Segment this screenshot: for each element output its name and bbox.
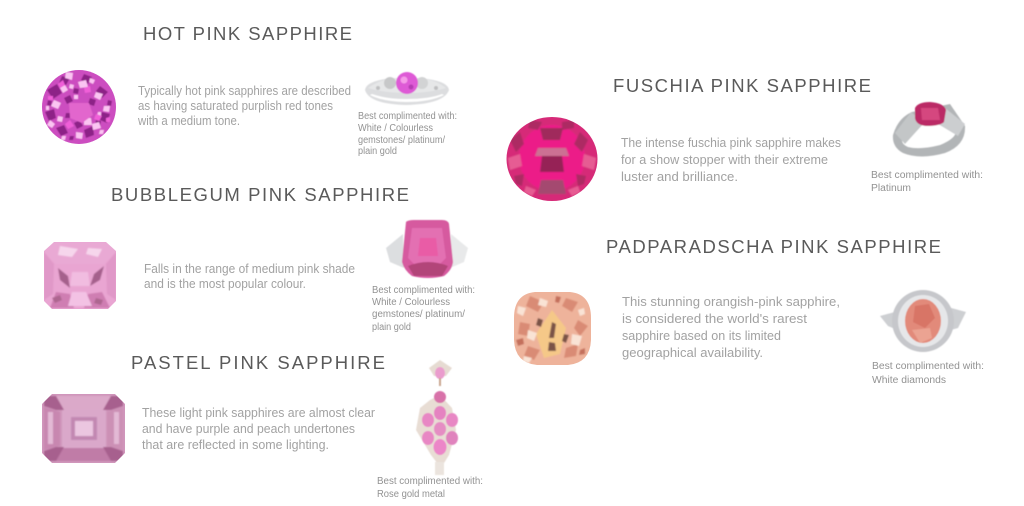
body text: padparadscha: This stunning orangish-pink sapphire, bbox=[622, 295, 840, 309]
note: padparadscha pairing: White diamonds bbox=[872, 375, 946, 386]
note: fuschia pairing: Platinum bbox=[871, 183, 911, 194]
heading: pastel: PASTEL PINK SAPPHIRE bbox=[131, 352, 385, 373]
note: padparadscha pairing: Best complimented with: bbox=[872, 361, 984, 372]
body text: padparadscha: geographical availability. bbox=[622, 346, 763, 360]
gem: bubblegum radiant cut bbox=[44, 242, 116, 309]
body text: pastel bbox=[142, 406, 375, 452]
gem: fuschia oval bbox=[505, 115, 599, 203]
gem: hot pink round bbox=[40, 68, 118, 146]
body text: hot pink: as having saturated purplish red tones bbox=[138, 99, 333, 113]
body text: bubblegum: and is the most popular colour. bbox=[144, 277, 306, 291]
note: pastel pairing bbox=[377, 476, 483, 500]
body text: fuschia: The intense fuschia pink sapphire makes bbox=[621, 136, 841, 150]
body text: hot pink: with a medium tone. bbox=[137, 114, 240, 128]
body text: fuschia: for a show stopper with their extreme bbox=[621, 153, 828, 167]
body text: bubblegum bbox=[144, 262, 355, 291]
panel: padparadscha pink sapphire bbox=[512, 236, 984, 386]
body text: pastel: and have purple and peach undertones bbox=[142, 422, 355, 436]
body text: fuschia: luster and brilliance. bbox=[621, 170, 738, 184]
note: hot pink pairing: gemstones/ platinum/ bbox=[358, 135, 445, 146]
body text: pastel: These light pink sapphires are almost clear bbox=[142, 406, 375, 420]
note: hot pink pairing: White / Colourless bbox=[358, 123, 433, 134]
body text: hot pink: Typically hot pink sapphires are described bbox=[138, 84, 351, 98]
body text: bubblegum: Falls in the range of medium pink shade bbox=[144, 262, 355, 276]
body text: hot pink bbox=[137, 84, 351, 128]
note: fuschia pairing bbox=[871, 170, 983, 194]
note: hot pink pairing: Best complimented with: bbox=[358, 111, 457, 122]
panel: bubblegum pink sapphire bbox=[42, 184, 475, 333]
note: bubblegum pairing: gemstones/ platinum/ bbox=[372, 309, 465, 320]
icon: fuschia ring bbox=[893, 102, 965, 156]
icon: padparadscha ring bbox=[880, 290, 966, 352]
body text: padparadscha: is considered the world's rarest bbox=[622, 312, 808, 326]
note: bubblegum pairing: White / Colourless bbox=[372, 297, 450, 308]
note: hot pink pairing bbox=[358, 111, 457, 157]
icon: bubblegum ring bbox=[386, 220, 468, 278]
gem: pastel emerald cut bbox=[40, 392, 127, 465]
heading: padparadscha: PADPARADSCHA PINK SAPPHIRE bbox=[606, 236, 941, 257]
note: pastel pairing: Rose gold metal bbox=[377, 489, 445, 500]
panel: hot pink sapphire bbox=[40, 23, 457, 157]
body text: pastel: that are reflected in some lighting. bbox=[142, 438, 329, 452]
note: bubblegum pairing bbox=[372, 285, 475, 333]
heading: hot pink: HOT PINK SAPPHIRE bbox=[143, 23, 352, 44]
body text: padparadscha: sapphire based on its limited bbox=[622, 329, 781, 343]
icon: hot pink ring bbox=[365, 72, 449, 105]
note: padparadscha pairing bbox=[872, 361, 984, 386]
heading: fuschia: FUSCHIA PINK SAPPHIRE bbox=[613, 75, 871, 96]
note: pastel pairing: Best complimented with: bbox=[377, 476, 483, 487]
body text: fuschia bbox=[621, 136, 841, 184]
panel: pastel pink sapphire bbox=[40, 352, 483, 500]
gem: padparadscha cushion bbox=[512, 290, 593, 367]
note: bubblegum pairing: Best complimented with: bbox=[372, 285, 475, 296]
body text: padparadscha bbox=[622, 295, 840, 360]
note: bubblegum pairing: plain gold bbox=[372, 322, 411, 333]
icon: pink gemstone earring bbox=[416, 360, 458, 475]
panel: fuschia pink sapphire bbox=[505, 75, 983, 203]
note: fuschia pairing: Best complimented with: bbox=[871, 170, 983, 181]
note: hot pink pairing: plain gold bbox=[358, 146, 397, 157]
heading: bubblegum: BUBBLEGUM PINK SAPPHIRE bbox=[111, 184, 409, 205]
